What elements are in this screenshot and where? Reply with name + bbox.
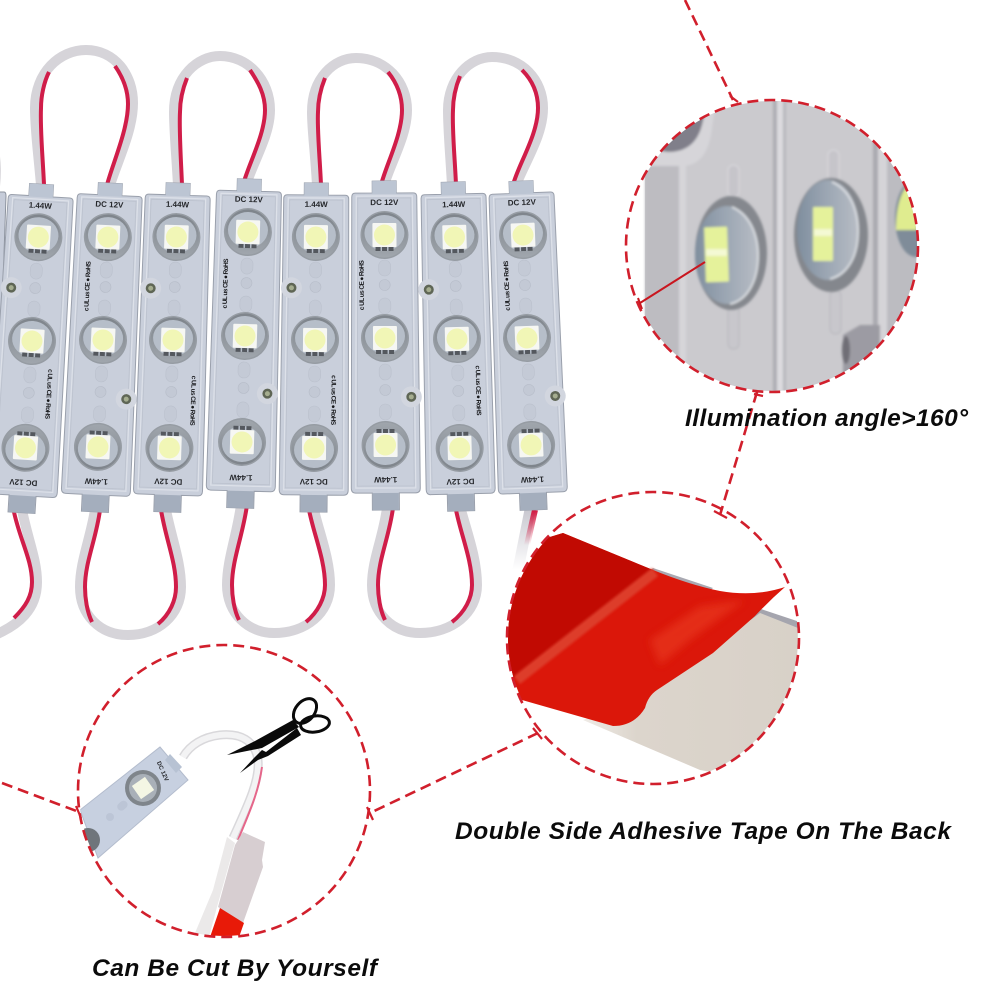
- dashed ring: [626, 100, 918, 392]
- LED lens 1: [695, 196, 767, 310]
- module 7: c UL us CE ● RoHS: [474, 365, 482, 416]
- callout: cut by yourself zoom: [76, 645, 370, 940]
- module 6: 1.44W: [374, 475, 397, 484]
- module 0 partial: [0, 192, 6, 400]
- dashed leader lines: [2, 0, 757, 813]
- leader: top to illumination circle: [685, 0, 733, 100]
- lens photo: [645, 100, 937, 392]
- module 4: [206, 178, 284, 509]
- module 7: 1.44W: [442, 200, 466, 209]
- tape photo: [490, 533, 800, 773]
- mini LED module: DC 12V: [155, 761, 169, 782]
- module 6: c UL us CE ● RoHS: [359, 259, 366, 310]
- red peel film: [490, 533, 785, 726]
- module 8: 1.44W: [520, 474, 544, 484]
- leader end ticks: [76, 96, 763, 820]
- module 3: 1.44W: [166, 200, 190, 209]
- module 6: [350, 181, 422, 510]
- icon: scissors: [227, 694, 330, 773]
- module 5: c UL us CE ● RoHS: [329, 375, 337, 426]
- module 8: c UL us CE ● RoHS: [503, 260, 512, 311]
- module 1: DC 12V: [8, 477, 38, 488]
- bottom wire loops: [0, 505, 535, 635]
- wire loop 4: [448, 57, 543, 185]
- label: adhesive tape: Double Side Adhesive Tape On The Back: [455, 818, 952, 845]
- module 2: [60, 182, 147, 514]
- module 1: c UL us CE ● RoHS: [43, 369, 53, 420]
- wire loop 2: [174, 56, 270, 185]
- stub wire fading out: [518, 510, 535, 570]
- module 3: DC 12V: [153, 476, 182, 486]
- module 2: DC 12V: [95, 199, 124, 210]
- wire loop 2: [227, 505, 330, 633]
- leader: illumination circle to tape circle: [720, 392, 757, 515]
- module 3: [133, 182, 213, 513]
- dashed ring: [507, 492, 799, 784]
- module 4: c UL us CE ● RoHS: [222, 258, 230, 309]
- LED module strip: [0, 178, 570, 515]
- module 8: [486, 180, 570, 511]
- module 4: DC 12V: [235, 195, 264, 204]
- module 6: DC 12V: [370, 198, 399, 207]
- wire loop 3: [312, 58, 407, 185]
- top wire loops: [35, 50, 543, 185]
- module 7: [416, 181, 496, 512]
- wire loop 0: [0, 510, 37, 635]
- wire loop 3: [372, 508, 477, 633]
- wire loop 1: [35, 50, 133, 185]
- module 2: c UL us CE ● RoHS: [83, 260, 93, 311]
- LED lens 2: [794, 178, 868, 292]
- LED lens 3 partial: [894, 186, 917, 258]
- module 5: 1.44W: [305, 200, 328, 209]
- wire loop 1: [80, 510, 181, 635]
- callout: adhesive tape zoom: [490, 492, 800, 784]
- dashed ring: [78, 645, 370, 937]
- module 1: 1.44W: [28, 201, 53, 211]
- label: illumination angle: Illumination angle>160°: [685, 405, 968, 432]
- mini LED module: [76, 747, 188, 858]
- module 7: DC 12V: [446, 477, 475, 486]
- dark film area: [508, 533, 653, 678]
- leader: left edge to cut circle: [2, 783, 79, 812]
- module 5: DC 12V: [299, 477, 328, 486]
- module 5: [279, 183, 351, 512]
- callout: illumination angle zoom: [626, 100, 937, 392]
- module 4: 1.44W: [229, 473, 253, 482]
- cut wire: [183, 735, 262, 840]
- film fold highlight: [517, 572, 655, 680]
- label: cut by yourself: Can Be Cut By Yourself: [92, 955, 380, 982]
- module 1: [0, 182, 76, 515]
- tape block: [195, 832, 265, 940]
- module 2: 1.44W: [84, 476, 108, 486]
- angle pointer line: [638, 262, 705, 309]
- module 3: c UL us CE ● RoHS: [188, 376, 197, 426]
- leader: tape circle to cut circle: [370, 733, 538, 813]
- module 8: DC 12V: [508, 198, 537, 208]
